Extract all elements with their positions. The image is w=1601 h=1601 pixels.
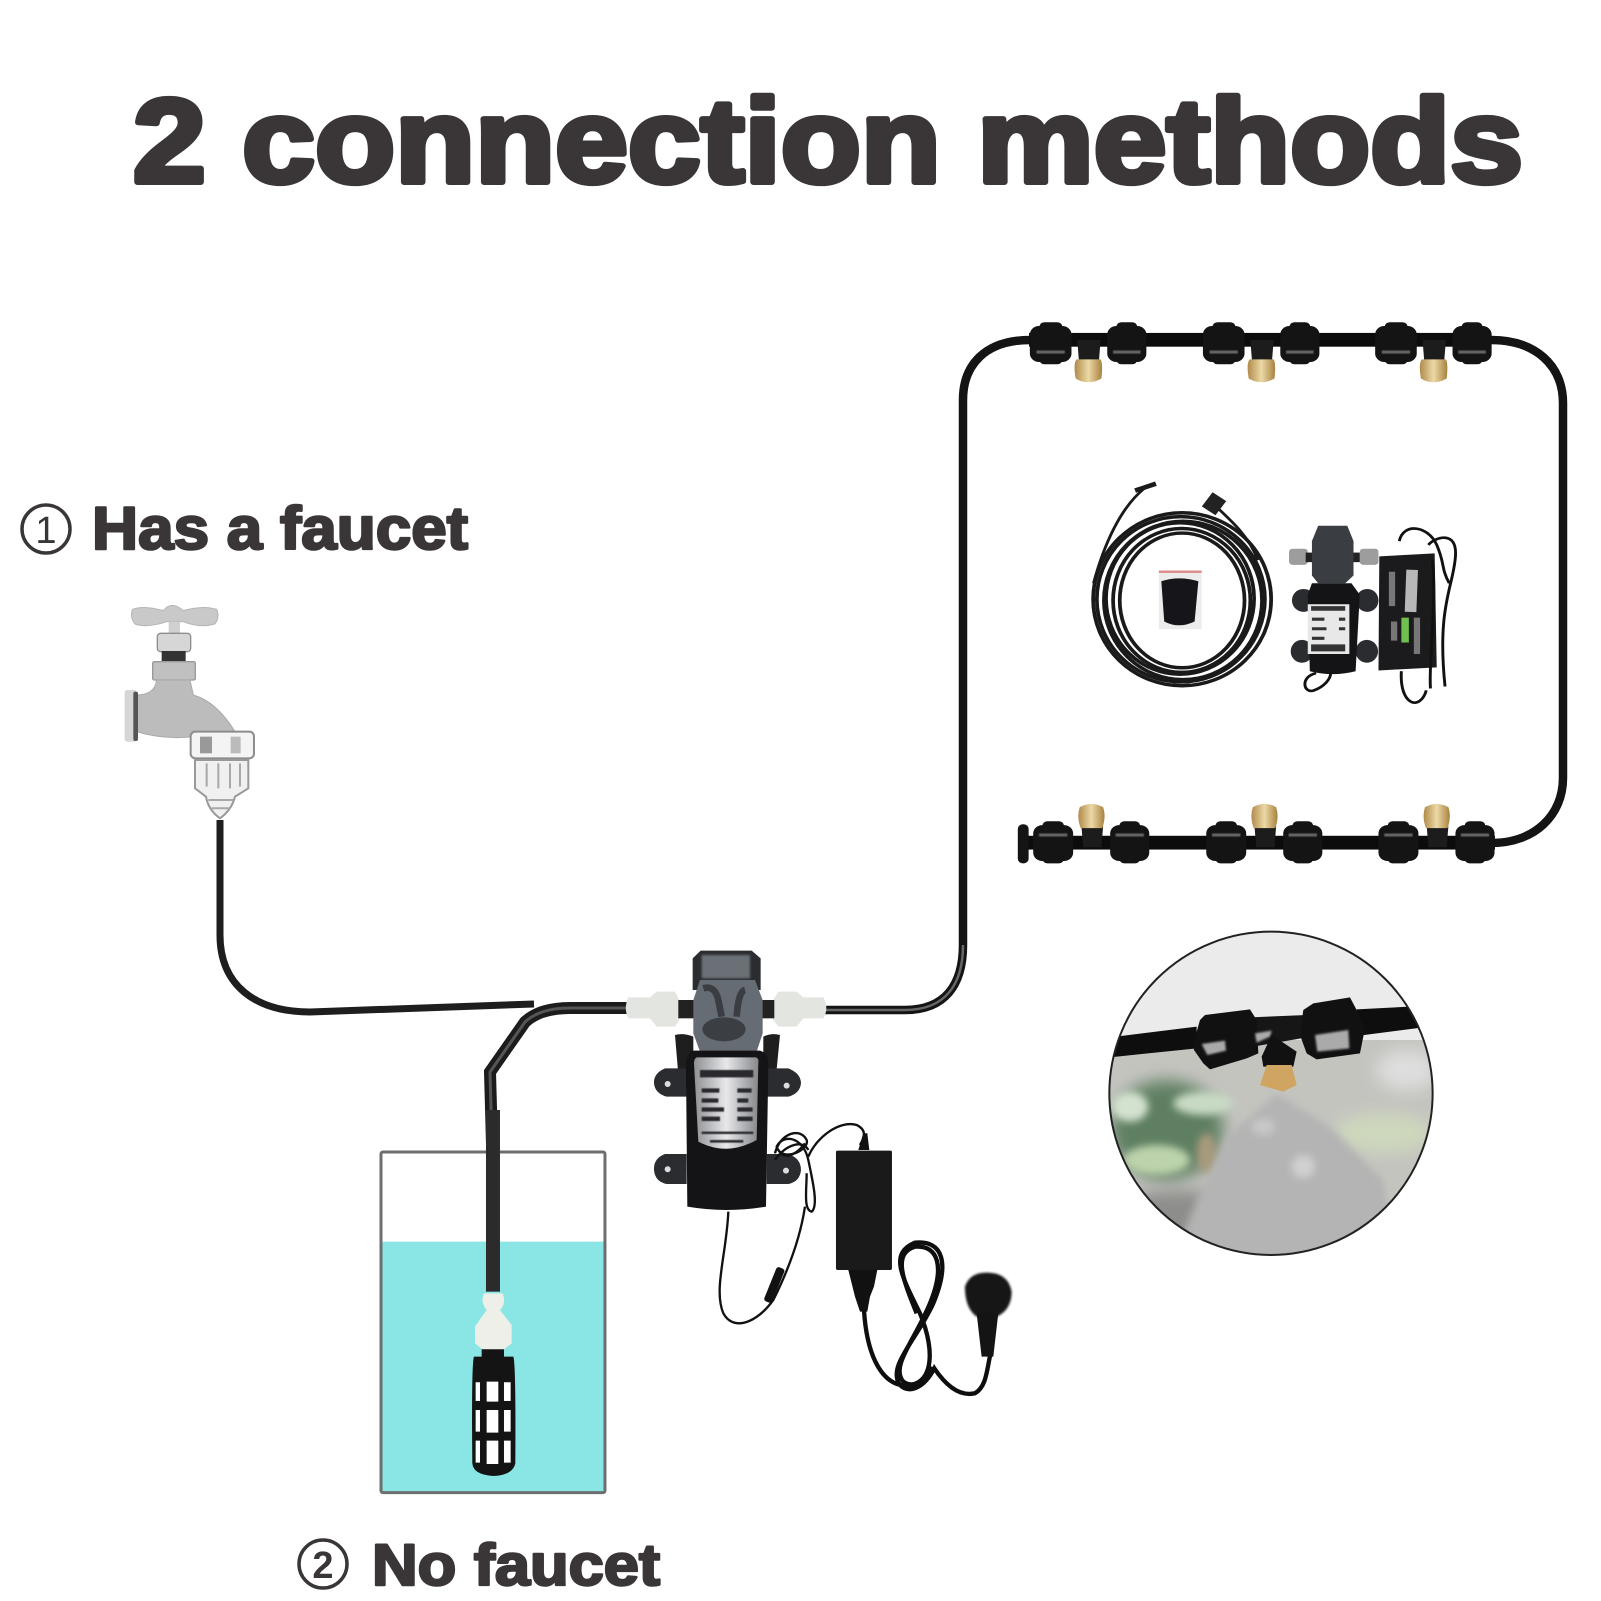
white fitting (475, 1293, 512, 1350)
pump head (693, 951, 761, 990)
kit: nozzle bag (1159, 571, 1202, 629)
heading: no faucet: 2 (312, 1545, 334, 1587)
plug (965, 1273, 1012, 1357)
power adapter (836, 1133, 892, 1312)
kit: adapter (1378, 529, 1456, 703)
heading: no faucet: No faucet (372, 1533, 660, 1598)
circular inset: mist nozzle (1103, 927, 1440, 1267)
hose: from water tank to pump (490, 1008, 635, 1180)
left fitting (626, 992, 679, 1027)
right fitting (773, 992, 826, 1027)
kit: coiled hose (1093, 484, 1271, 686)
brass nozzle (1260, 1065, 1297, 1092)
pipe (1110, 1006, 1423, 1057)
power cord (864, 1242, 991, 1394)
kit: pump (1289, 526, 1378, 691)
tank outline (381, 1152, 605, 1493)
title: 2 connection methods (133, 75, 1523, 208)
hose: pump to misting rails (825, 340, 1563, 1010)
motor cylinder (686, 1051, 768, 1210)
water (382, 1242, 604, 1492)
main pump (626, 951, 1012, 1394)
fitting barrels (1193, 1009, 1258, 1069)
circle outline (1109, 932, 1433, 1255)
hose: from faucet to pump gap (220, 820, 534, 1012)
heading: has a faucet: 1 (35, 510, 57, 552)
blurred garden background (1110, 932, 1432, 1232)
mounting tabs (654, 1068, 801, 1097)
tee stem (1262, 1035, 1297, 1067)
water tank with strainer (381, 1110, 605, 1493)
top rail (1029, 322, 1492, 382)
faucet (125, 605, 254, 818)
mist spray (1182, 1096, 1387, 1254)
coiled wire (720, 1124, 864, 1323)
silver label (694, 1057, 759, 1149)
bottom rail (1018, 804, 1495, 863)
brackets (675, 1034, 780, 1087)
heading: has a faucet: Has a faucet (92, 495, 468, 562)
misting rails (1018, 322, 1495, 863)
hose in tank (486, 1110, 500, 1292)
strainer (472, 1349, 515, 1476)
